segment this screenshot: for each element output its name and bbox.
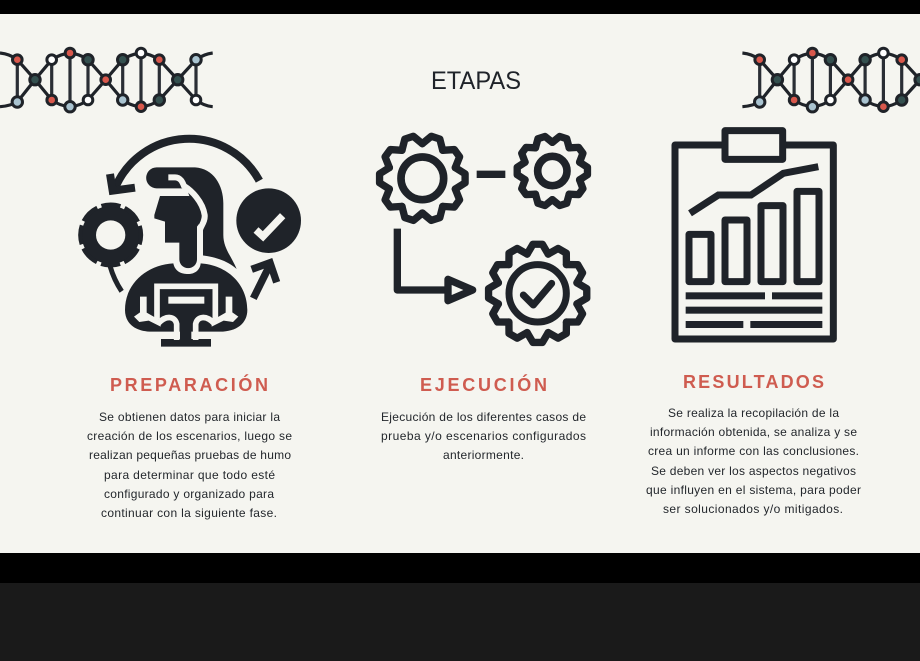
heading: preparación: PREPARACIÓN	[110, 374, 268, 395]
icon: DNA strand left	[0, 48, 213, 112]
text block: resultados: Se deben ver los aspectos negativos	[651, 464, 856, 478]
trend line	[690, 167, 818, 213]
clip	[725, 131, 783, 159]
check circle	[236, 188, 301, 253]
text block: preparación: para determinar que todo esté	[104, 468, 275, 482]
gear with check	[489, 244, 587, 342]
text block: ejecución	[381, 410, 586, 462]
connector line	[477, 163, 505, 185]
text block: resultados: Se realiza la recopilación de la	[668, 406, 839, 420]
text block: resultados: que influyen en el sistema, para poder	[646, 483, 861, 497]
cycle arrow top	[110, 139, 259, 191]
text block: preparación: creación de los escenarios, luego se	[87, 429, 292, 443]
arrow up right	[252, 263, 277, 298]
heading: ejecución: EJECUCIÓN	[420, 374, 547, 395]
text block: preparación: Se obtienen datos para iniciar la	[99, 410, 280, 424]
gear top right	[517, 135, 587, 207]
clipboard frame	[675, 145, 833, 339]
bars	[689, 191, 819, 282]
text block: preparación: continuar con la siguiente fase.	[101, 506, 277, 520]
person body	[125, 263, 247, 347]
title: ETAPAS	[431, 67, 521, 95]
text block: preparación: realizan pequeñas pruebas de humo	[89, 448, 291, 462]
elbow arrow	[397, 229, 473, 301]
gear top left	[380, 134, 465, 222]
icon: DNA strand right	[742, 48, 920, 112]
icon: clipboard with bar chart	[675, 131, 833, 339]
filled gear	[80, 205, 141, 291]
person face and neck	[154, 196, 201, 268]
text block: preparación	[87, 410, 292, 520]
text block: ejecución: Ejecución de los diferentes casos de	[381, 410, 586, 424]
text block: resultados: ser solucionados y/o mitigados.	[663, 502, 843, 516]
text block: resultados	[646, 406, 861, 516]
text block: ejecución: prueba y/o escenarios configurados	[381, 429, 586, 443]
dark footer band	[0, 583, 920, 661]
text block: ejecución: anteriormente.	[443, 448, 524, 462]
text block: resultados: crea un informe con las conclusiones.	[648, 444, 859, 458]
heading: resultados: RESULTADOS	[683, 372, 824, 392]
icon: gears process	[380, 134, 587, 342]
text block: resultados: información obtenida, se analiza y se	[650, 425, 857, 439]
text lines	[686, 292, 822, 328]
person hair	[146, 167, 237, 269]
icon: person with gear and check cycle	[80, 139, 301, 347]
text block: preparación: configurado y organizado para	[104, 487, 274, 501]
